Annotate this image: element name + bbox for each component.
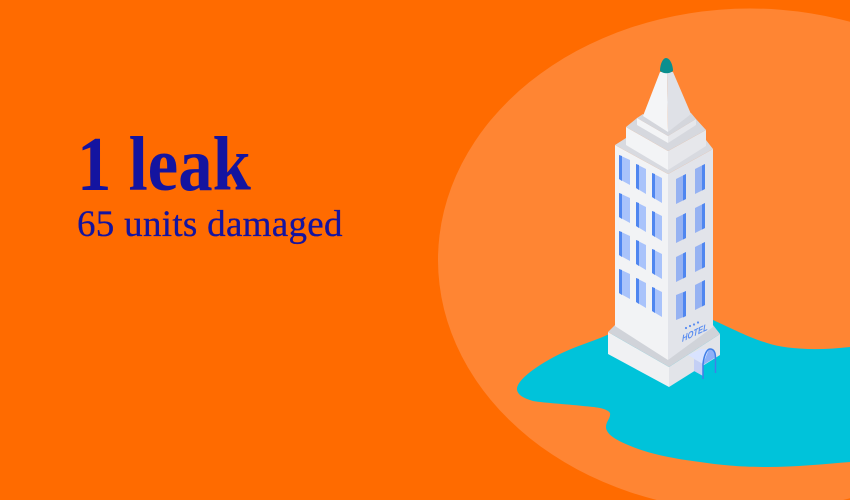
windows: right face (676, 164, 705, 320)
hotel building (608, 58, 720, 387)
entrance canopy (688, 349, 716, 379)
hotel sign: HOTEL (682, 321, 708, 344)
spire (643, 72, 691, 132)
window frames: right face (683, 164, 705, 318)
heading: 1 leak (77, 121, 251, 207)
spire tip (660, 58, 673, 73)
base plinth (608, 325, 720, 387)
background circle (438, 8, 850, 500)
hotel sign stars (685, 321, 699, 329)
upper tier (626, 113, 706, 170)
windows: left face (619, 155, 662, 317)
window frames: left face (619, 155, 655, 313)
subheading: 65 units damaged (77, 204, 343, 245)
tower body (615, 138, 713, 360)
water puddle (517, 320, 850, 467)
